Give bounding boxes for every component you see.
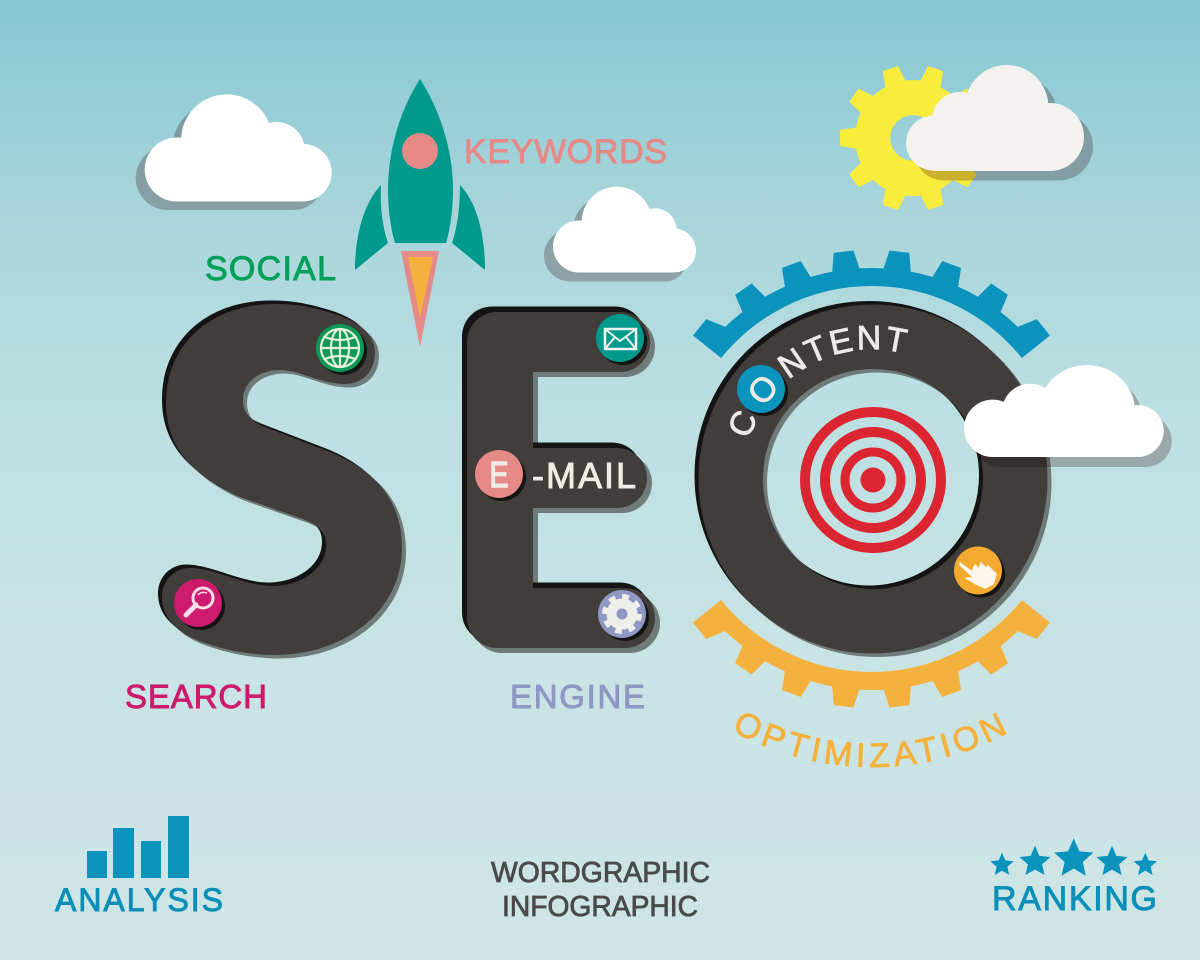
icon: magnifier (174, 579, 225, 630)
letter E (462, 306, 660, 653)
blue gear arc (693, 250, 1050, 352)
gear: yellow (840, 65, 986, 211)
letter S (158, 300, 406, 658)
rating stars (990, 838, 1157, 876)
cloud: right over O (964, 365, 1172, 467)
target (805, 412, 941, 548)
icon: globe (316, 324, 367, 375)
icon: envelope (596, 314, 647, 365)
label: keywords: KEYWORDS (464, 133, 667, 171)
icon: hand (954, 546, 1005, 598)
label: content: CONTENT (730, 325, 908, 436)
cloud: top right over gear (906, 65, 1093, 180)
heading: wordgraphic infographic: INFOGRAPHIC (502, 891, 698, 923)
orange gear arc (693, 606, 1050, 708)
rocket (355, 79, 485, 347)
label: search: SEARCH (125, 678, 267, 715)
badge: blue O (737, 365, 788, 416)
label: optimization: OPTIMIZATION (736, 712, 1006, 768)
heading: wordgraphic infographic: WORDGRAPHIC (491, 857, 710, 889)
label: ranking: RANKING (992, 880, 1157, 918)
label: social: SOCIAL (205, 250, 336, 288)
cloud: top left (136, 94, 332, 210)
cloud: center (544, 187, 696, 282)
label: analysis: ANALYSIS (55, 882, 223, 918)
letter O (727, 333, 1019, 625)
icon: settings gear (598, 590, 649, 641)
icon: E badge (475, 450, 526, 501)
label: -mail: -MAIL (532, 455, 636, 496)
label: engine: ENGINE (510, 678, 645, 715)
bar chart icon (87, 816, 189, 878)
icon: E badge: E (490, 454, 508, 495)
heading: wordgraphic infographic (491, 857, 710, 923)
